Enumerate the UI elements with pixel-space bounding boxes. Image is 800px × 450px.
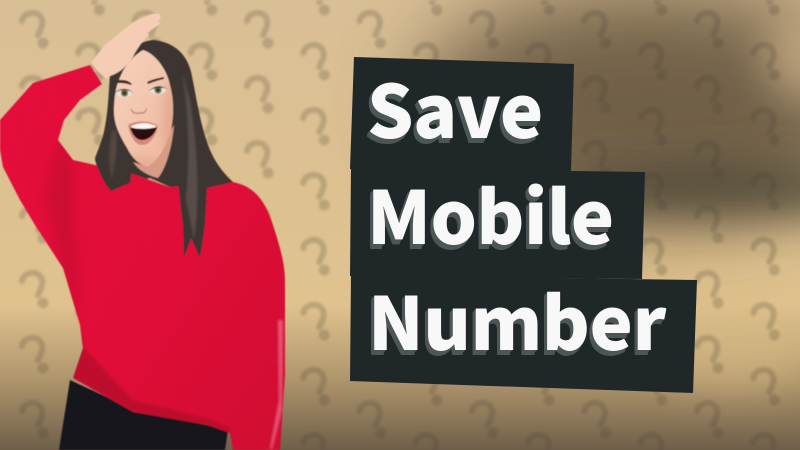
title line: Mobile: Mobile <box>367 160 614 266</box>
eyes <box>115 86 167 97</box>
back hair <box>95 40 233 258</box>
neck <box>130 150 172 190</box>
mouth <box>128 121 158 145</box>
sweater <box>0 64 286 450</box>
woman <box>0 0 300 450</box>
title line: Save: Save <box>367 54 543 160</box>
face <box>113 49 174 168</box>
raised hand <box>91 14 160 79</box>
title panel: Number <box>350 275 697 393</box>
eyebrows <box>116 77 164 85</box>
title line: Number: Number <box>368 266 666 372</box>
jeans <box>59 380 228 450</box>
title panel: Save <box>350 57 574 172</box>
hair over sweater <box>146 40 233 258</box>
nose <box>131 107 147 114</box>
title panel: Mobile <box>350 168 645 279</box>
